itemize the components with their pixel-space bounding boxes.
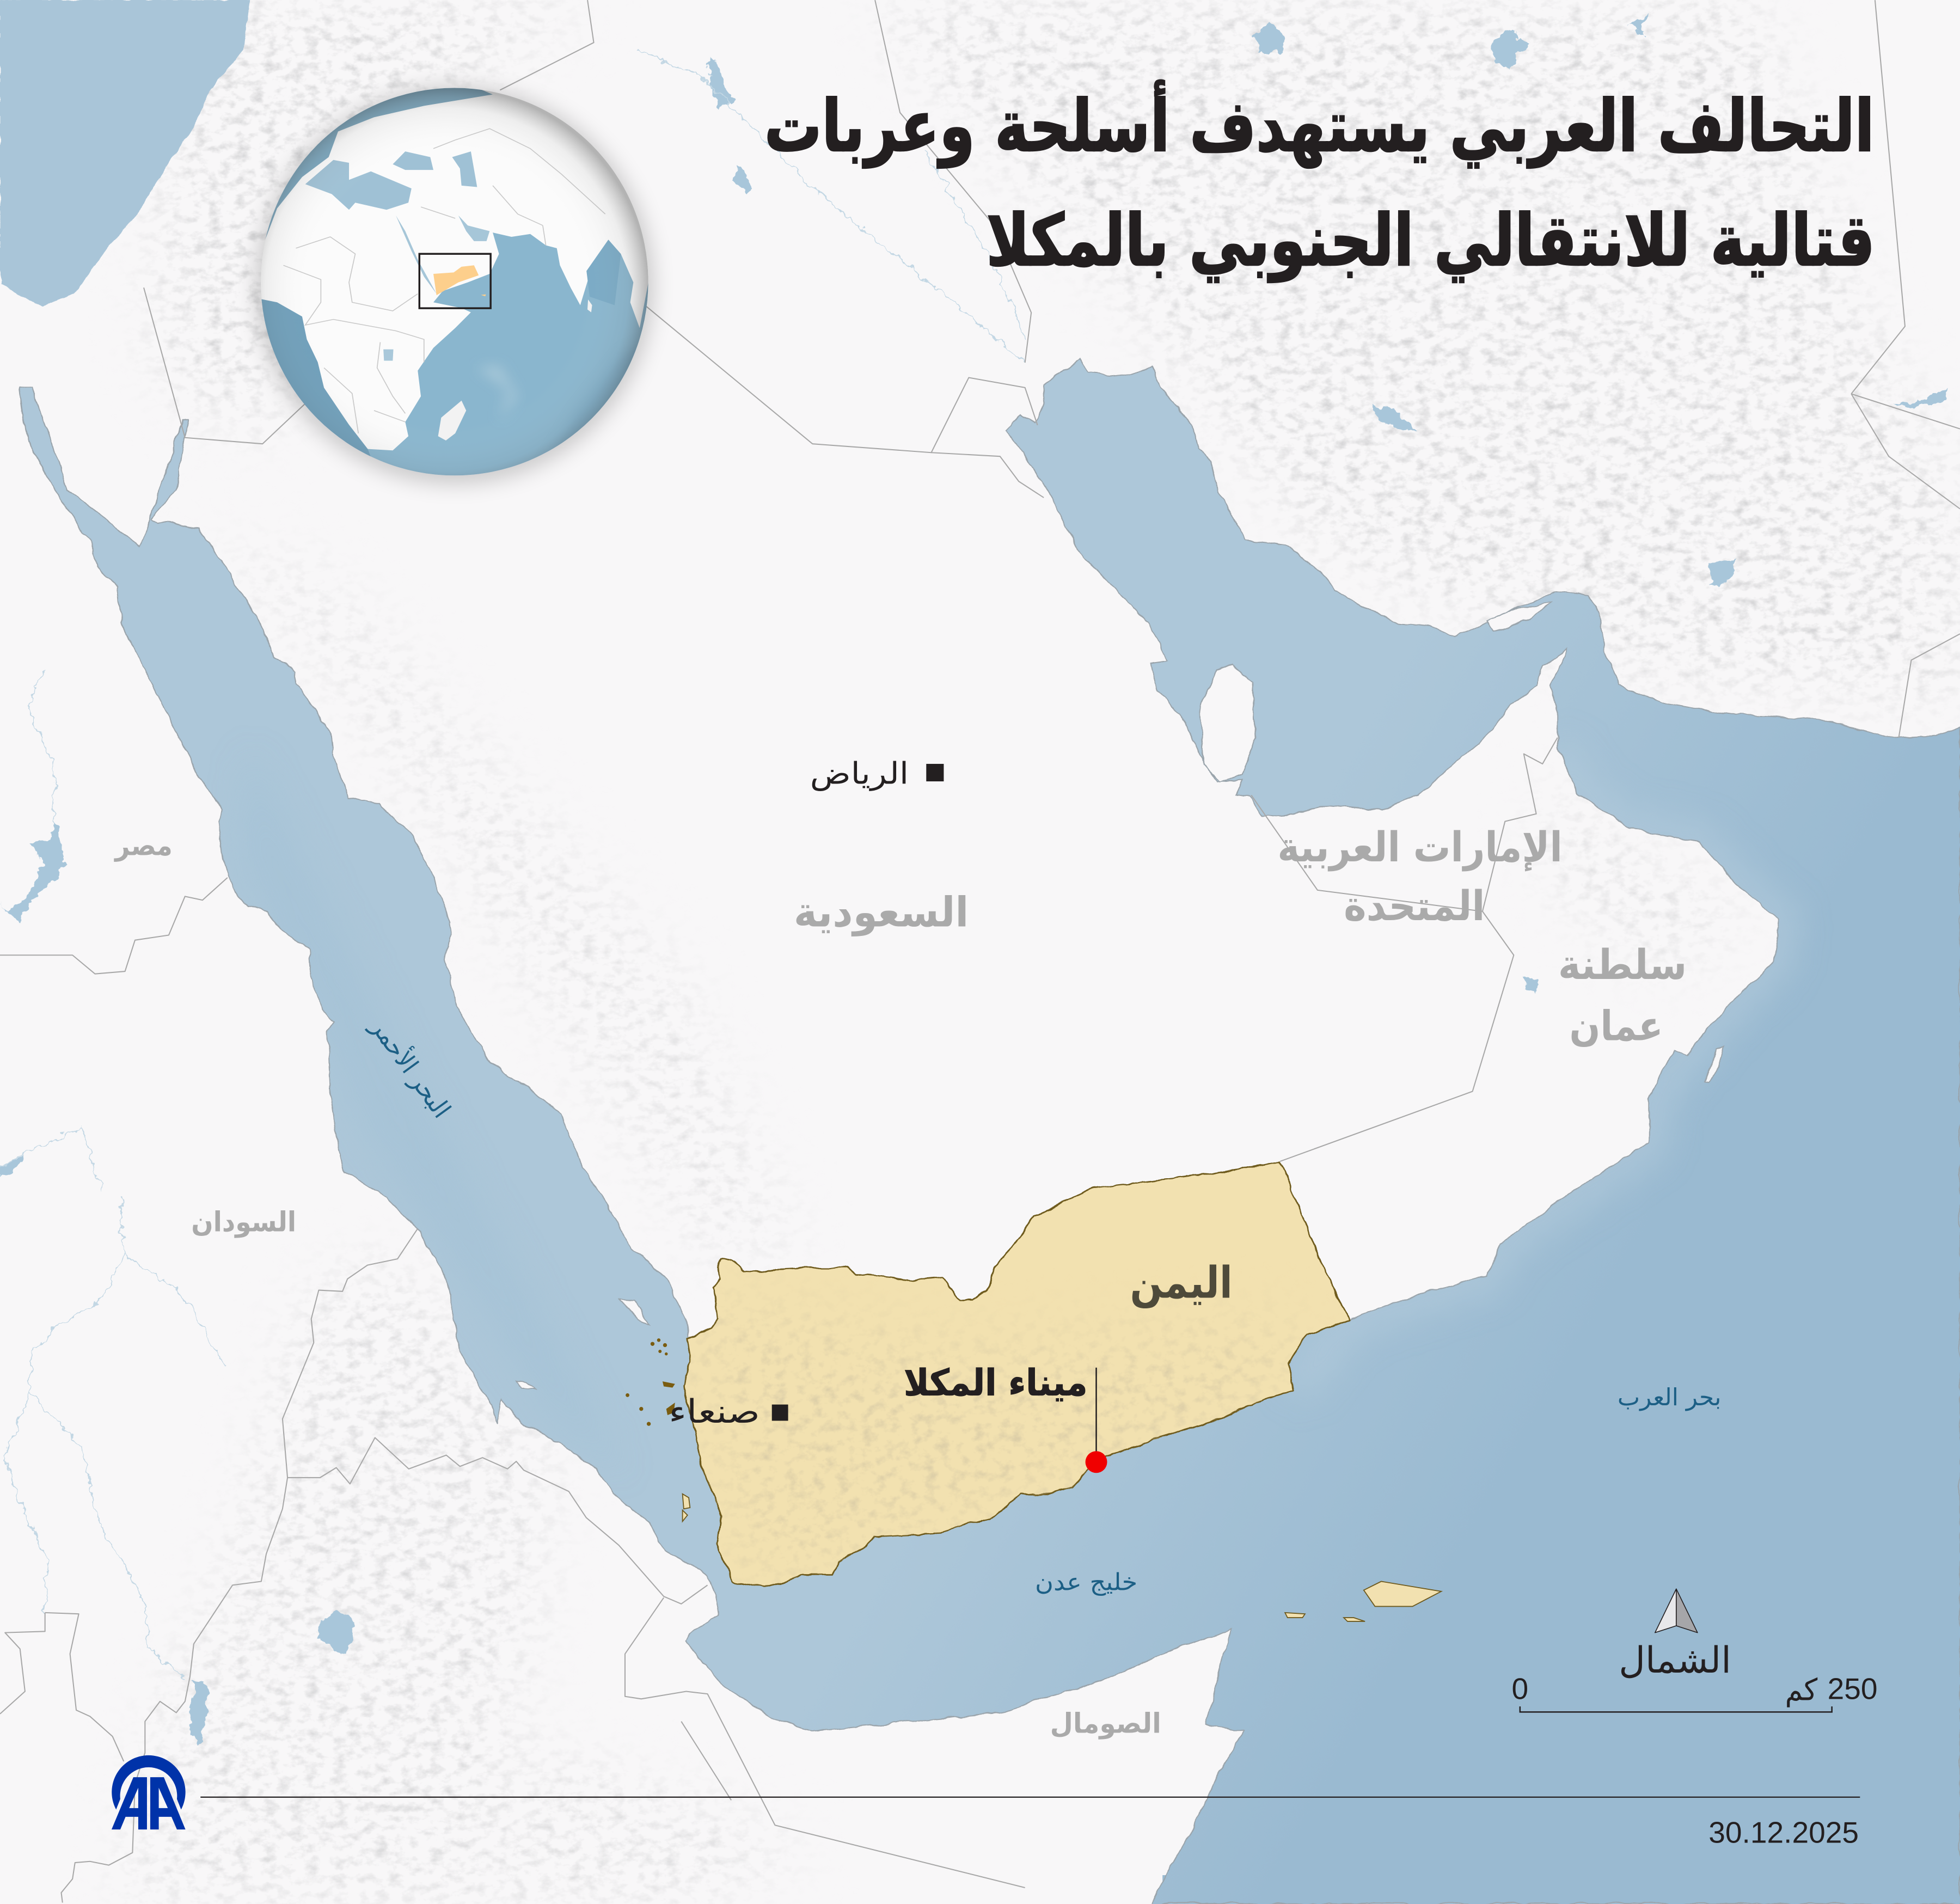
title (764, 80, 1875, 283)
label: Arabian Sea: بحر العرب (1618, 1384, 1721, 1411)
label: Yemen: اليمن (1130, 1257, 1233, 1308)
scale bar: 0 (1512, 1672, 1528, 1705)
label: Sanaa: صنعاء (669, 1393, 760, 1431)
Socotra and Yemeni islands (683, 1494, 1441, 1621)
callout: Mukalla port (904, 1361, 1107, 1473)
date: 30.12.2025 (1708, 1815, 1859, 1849)
Anadolu Agency logo (112, 1755, 186, 1829)
scale bar: 250 (1828, 1672, 1878, 1705)
label: Oman (1558, 941, 1687, 1050)
label: Sanaa (669, 1393, 788, 1431)
label: UAE: المتحدة (1344, 882, 1485, 930)
Qatar and Gulf islands (515, 603, 1724, 1389)
north arrow: الشمال (1619, 1639, 1731, 1681)
label: Sudan: السودان (191, 1206, 296, 1239)
locator globe (249, 77, 687, 496)
label: Red Sea: البحر الأحمر (364, 1012, 457, 1124)
label: Oman: سلطنة (1558, 941, 1687, 989)
label: Saudi Arabia: السعودية (794, 888, 969, 936)
globe locator box (419, 254, 491, 308)
footer line (200, 1797, 1860, 1798)
scale bar: كم (1785, 1673, 1818, 1707)
label: Somalia: الصومال (1050, 1707, 1161, 1740)
sea edge underlay (1162, 750, 1960, 1904)
globe Yemen (433, 265, 479, 295)
globe shadow (257, 88, 652, 482)
label: Riyadh: الرياض (810, 756, 909, 792)
label: UAE: الإمارات العربية (1277, 823, 1563, 872)
label: Oman: عمان (1570, 1002, 1663, 1050)
label: Gulf of Aden: خليج عدن (1035, 1569, 1137, 1596)
globe land details (438, 401, 466, 440)
callout: Mukalla port: ميناء المكلا (904, 1361, 1087, 1404)
scale bar (1512, 1672, 1878, 1712)
north arrow (1619, 1589, 1731, 1681)
label: UAE (1277, 823, 1563, 930)
rivers (0, 50, 1025, 1679)
label: Egypt: مصر (113, 830, 173, 862)
globe ocean depth (477, 339, 656, 482)
Red Sea small islands (626, 1338, 675, 1426)
label: Riyadh (810, 756, 944, 792)
globe oceans (249, 77, 687, 496)
